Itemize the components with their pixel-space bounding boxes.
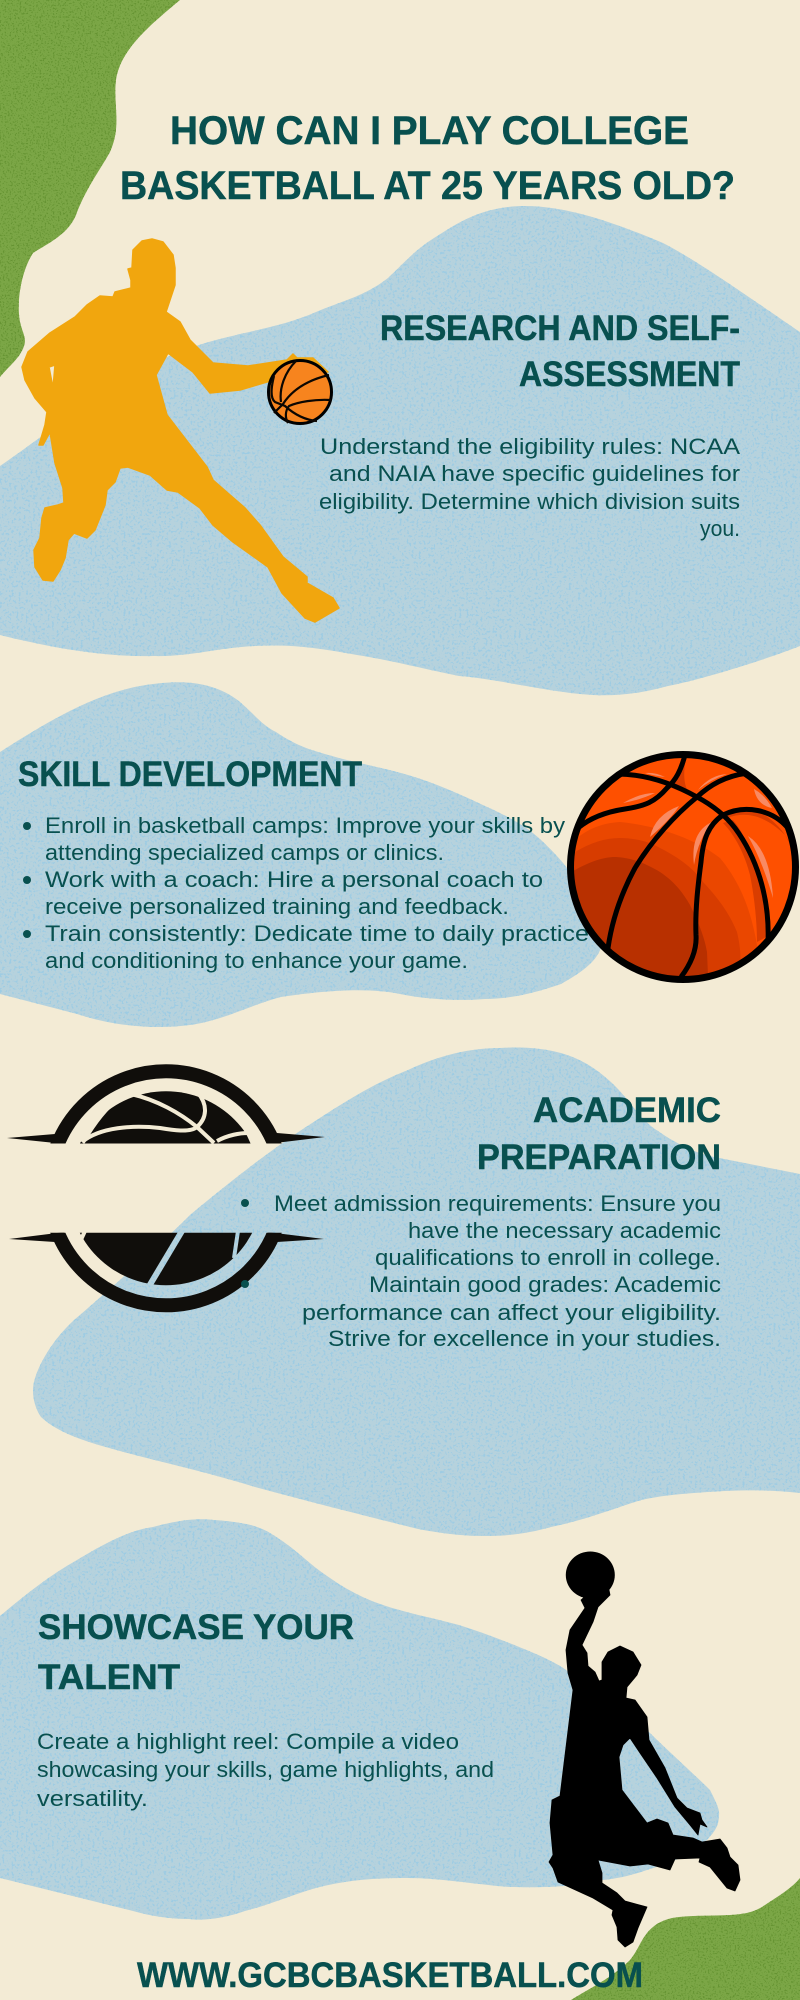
text block: research body: you. xyxy=(700,516,740,541)
text block: academic bullets: Meet admission requirements: Ensure you xyxy=(274,1191,721,1216)
footer website url: WWW.GCBCBASKETBALL.COM xyxy=(137,1956,643,1995)
text block: research body: eligibility. Determine which division suits xyxy=(319,489,740,514)
text block: showcase body: showcasing your skills, game highlights, and xyxy=(37,1757,494,1782)
heading: showcase your talent: TALENT xyxy=(38,1658,180,1697)
icon: black jumping player silhouette with ball xyxy=(549,1552,740,1947)
text block: academic bullets: have the necessary academic xyxy=(408,1218,721,1243)
heading: skill development: SKILL DEVELOPMENT xyxy=(18,755,362,794)
text block: research body: and NAIA have specific guidelines for xyxy=(329,461,740,486)
heading: research and self-assessment: ASSESSMENT xyxy=(519,355,740,394)
panel: academic preparation background xyxy=(33,1047,800,1536)
text block: skill development bullets: and conditioning to enhance your game. xyxy=(45,948,468,973)
text block: skill development bullets xyxy=(23,813,589,973)
text block: showcase body xyxy=(37,1729,494,1811)
heading: academic preparation: PREPARATION xyxy=(477,1138,721,1177)
heading: academic preparation xyxy=(477,1091,721,1177)
panel: showcase background xyxy=(0,1519,719,1920)
title: BASKETBALL AT 25 YEARS OLD? xyxy=(120,164,735,208)
text block: academic bullets: performance can affect your eligibility. xyxy=(302,1300,721,1325)
text block: academic bullets xyxy=(241,1191,721,1351)
text block: skill development bullets: receive personalized training and feedback. xyxy=(45,894,509,919)
heading: showcase your talent: SHOWCASE YOUR xyxy=(38,1608,354,1647)
text block: skill development bullets: Work with a coach: Hire a personal coach to xyxy=(45,867,543,892)
icon: small basketball xyxy=(268,360,332,424)
text block: academic bullets: qualifications to enroll in college. xyxy=(375,1245,721,1270)
text block: research body: Understand the eligibility rules: NCAA xyxy=(320,434,740,459)
text block: academic bullets: Strive for excellence in your studies. xyxy=(328,1326,721,1351)
panel: research background xyxy=(0,206,800,695)
heading: showcase your talent xyxy=(38,1608,354,1697)
green blob top left xyxy=(0,0,180,377)
heading: research and self-assessment xyxy=(380,309,740,394)
heading: academic preparation: ACADEMIC xyxy=(533,1091,721,1130)
text block: skill development bullets: attending specialized camps or clinics. xyxy=(45,840,444,865)
text block: research body xyxy=(319,434,740,541)
title: HOW CAN I PLAY COLLEGE xyxy=(170,109,689,153)
icon: orange dribbling player silhouette xyxy=(22,239,339,622)
text block: skill development bullets: Train consistently: Dedicate time to daily practice xyxy=(45,921,589,946)
text block: showcase body: versatility. xyxy=(37,1786,148,1811)
heading: research and self-assessment: RESEARCH AND SELF- xyxy=(380,309,740,348)
panel: skill development background xyxy=(0,682,602,1027)
icon: large basketball xyxy=(565,754,796,1000)
text block: showcase body: Create a highlight reel: Compile a video xyxy=(37,1729,459,1754)
green blob bottom right xyxy=(571,1878,800,2000)
text block: skill development bullets: Enroll in basketball camps: Improve your skills by xyxy=(45,813,565,838)
title xyxy=(120,109,735,208)
text block: academic bullets: Maintain good grades: Academic xyxy=(369,1272,721,1297)
icon: split basketball logo xyxy=(7,1071,325,1305)
